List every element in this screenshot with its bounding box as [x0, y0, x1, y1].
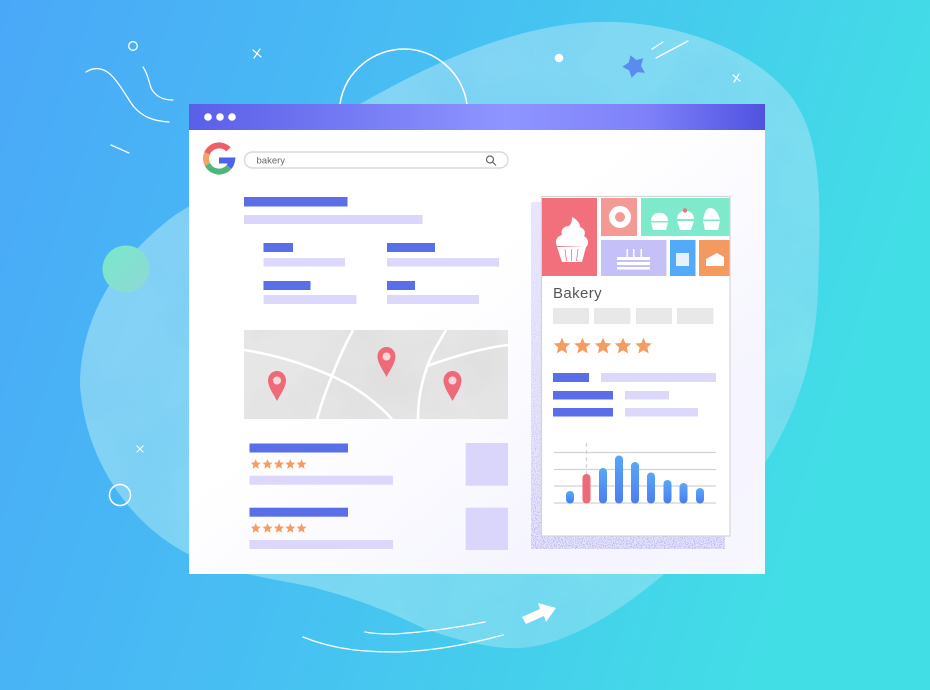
- background blob: [70, 15, 830, 655]
- icon: blue star: [622, 55, 645, 78]
- business card panel: [542, 196, 730, 536]
- search text: bakery: [256, 156, 285, 166]
- action buttons: [553, 308, 714, 324]
- map pins: [268, 347, 462, 401]
- browser title bar: [189, 104, 765, 130]
- decorative small circles: [110, 42, 137, 505]
- sitelinks: [264, 243, 499, 304]
- review 2: [250, 508, 508, 550]
- icon: magnifier: [486, 156, 496, 166]
- browser window: [189, 104, 765, 574]
- photo tile: donut: [601, 198, 637, 236]
- card shadow: [531, 202, 725, 549]
- icon: arrow: [522, 603, 556, 624]
- browser page: [189, 104, 765, 574]
- decorative large circle arc: [340, 49, 467, 104]
- photo tile: cupcakes: [641, 198, 730, 236]
- rating stars: [554, 338, 652, 353]
- decorative dot: [555, 54, 563, 62]
- icon: google logo: [206, 145, 232, 172]
- map: [244, 330, 508, 419]
- results heading bars: [244, 197, 422, 224]
- photo tile: cake slice: [699, 240, 730, 276]
- info rows: [553, 373, 716, 416]
- photo tile: cracker: [670, 240, 696, 276]
- decorative crosses: [137, 49, 740, 452]
- bar chart: [554, 443, 716, 504]
- search box: [244, 152, 508, 168]
- map roads: [244, 330, 508, 419]
- mint circle: [102, 246, 150, 292]
- review 1: [250, 443, 508, 486]
- window dots: [204, 113, 236, 121]
- business title: Bakery: [553, 285, 602, 302]
- photo tile: birthday cake: [601, 240, 666, 276]
- decorative squiggle lines: [86, 41, 688, 652]
- photo tile: cupcake: [542, 198, 597, 276]
